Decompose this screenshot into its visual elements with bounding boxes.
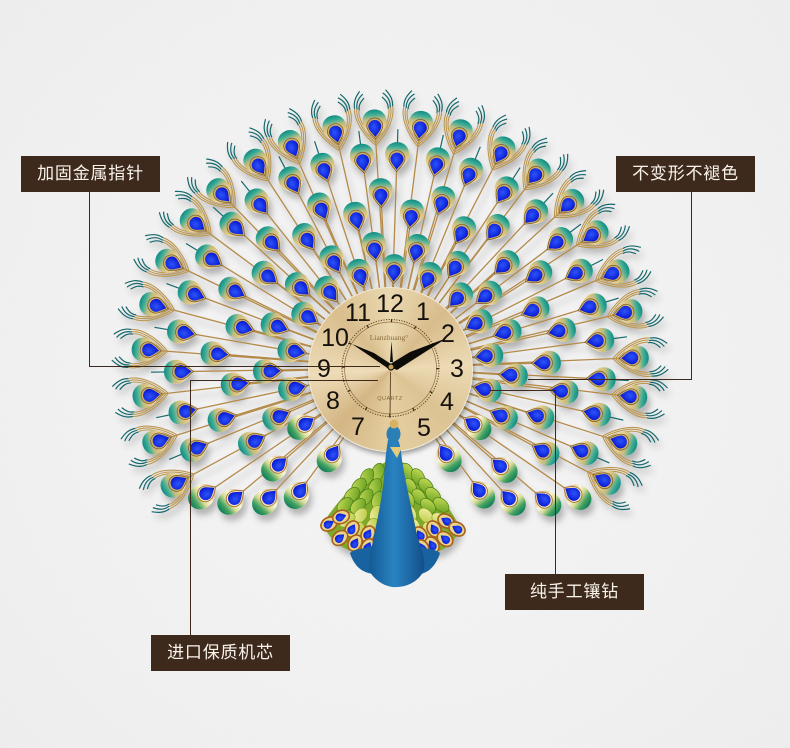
body lobes [350, 546, 440, 574]
label: reinforced metal hands [21, 156, 160, 192]
clock numerals: 7 [351, 413, 365, 441]
beak [390, 447, 402, 458]
clock numerals: 9 [317, 355, 331, 383]
third ring of feathers [200, 178, 580, 470]
clock hands [352, 338, 447, 418]
neck and body [369, 440, 424, 587]
clock numerals: 10 [321, 324, 349, 352]
yellow wing scales [336, 503, 451, 541]
clock quartz text: QUARTZ [377, 396, 403, 402]
clock face [308, 287, 472, 452]
crown [390, 420, 398, 428]
clock numerals: 11 [345, 299, 371, 327]
clock numerals: 12 [376, 290, 404, 318]
fourth ring of feathers [220, 198, 561, 460]
label: no deformation or fading [616, 156, 755, 192]
leader lines [90, 192, 692, 635]
outer ring of plumed feathers [111, 89, 669, 517]
head [386, 426, 400, 442]
clock numerals: 8 [326, 387, 340, 415]
label: no deformation or fading: 不变形不褪色 [632, 164, 739, 183]
fan of feathers around clock [111, 89, 669, 522]
clock numerals: 1 [416, 298, 430, 326]
peacock figurine [318, 420, 468, 587]
wing base [323, 462, 460, 553]
clock numerals: 2 [441, 320, 455, 348]
label: reinforced metal hands: 加固金属指针 [37, 164, 144, 183]
clock numerals: 4 [440, 388, 454, 416]
clock numerals: 3 [450, 355, 464, 383]
bottom green-tipped feathers [183, 304, 596, 522]
clock numerals [317, 290, 464, 442]
blue wing jewels [318, 508, 468, 558]
clock numerals: 5 [417, 414, 431, 442]
inner ring of feathers [276, 254, 505, 443]
label: hand-set diamonds: 纯手工镶钻 [530, 582, 619, 601]
clock brand text: Lianzhuang° [370, 333, 408, 342]
label: imported quality movement: 进口保质机芯 [167, 643, 274, 662]
clock minute ring [342, 320, 439, 416]
green wing scales [334, 461, 452, 517]
fifth ring of feathers [253, 231, 528, 434]
second ring of feathers [151, 129, 629, 474]
label: imported quality movement [151, 635, 290, 671]
label: hand-set diamonds [505, 574, 644, 610]
